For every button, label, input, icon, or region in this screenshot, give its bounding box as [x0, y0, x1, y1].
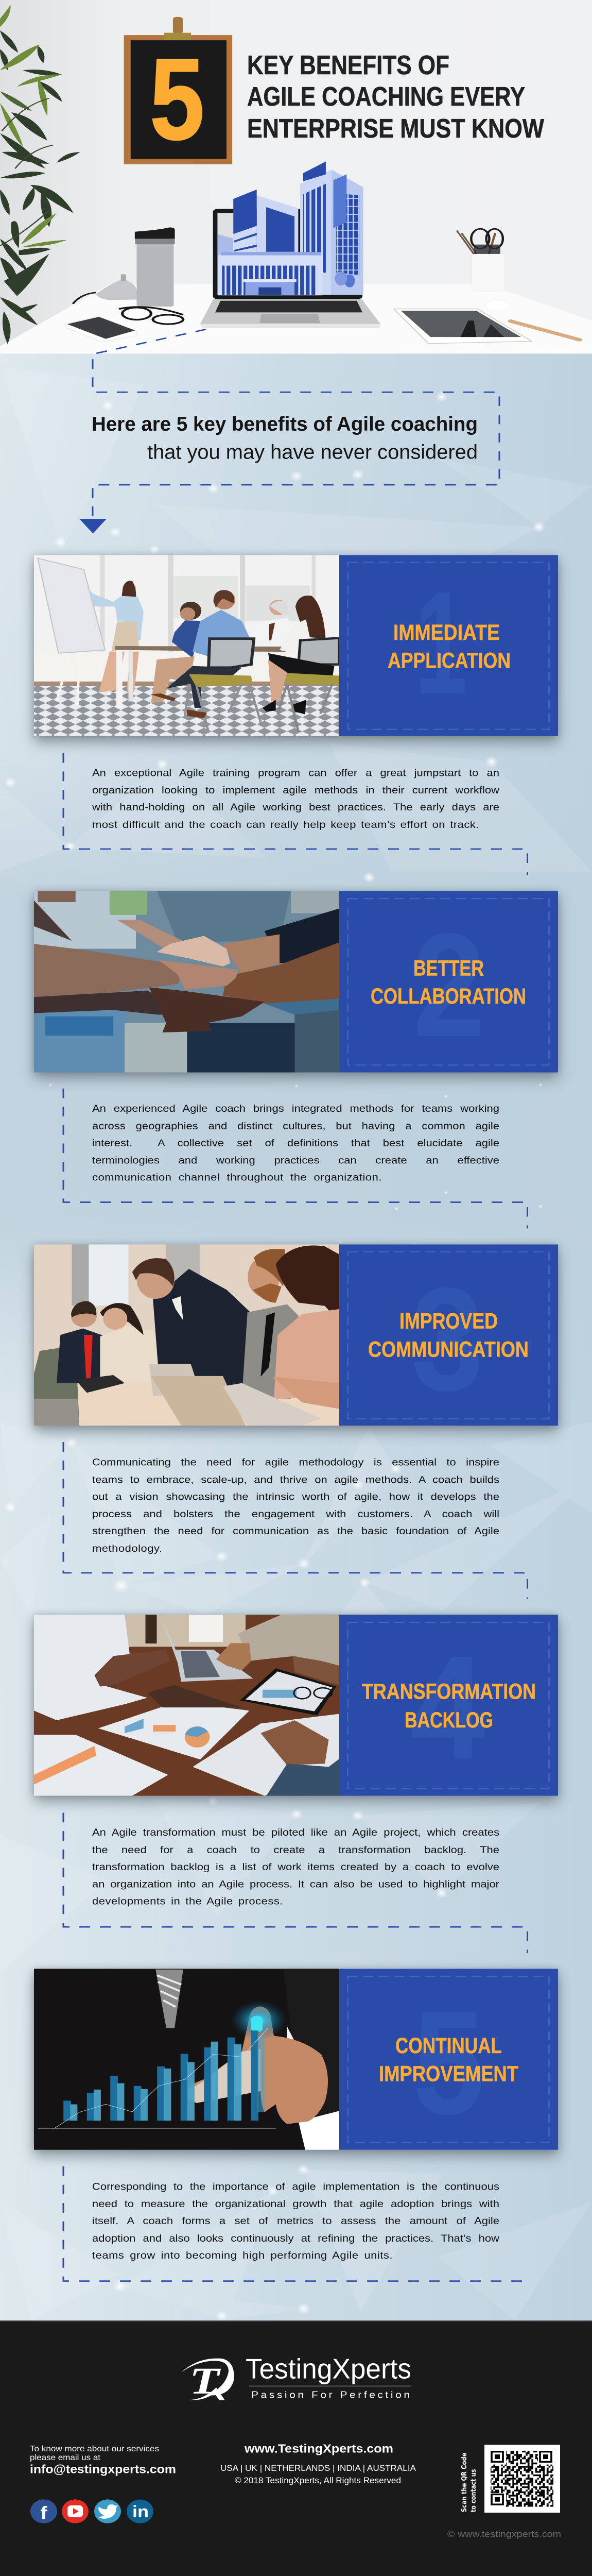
icon: facebook	[30, 2499, 57, 2523]
text block: transformation backlog: An Agile transformation must be piloted like an Agile project, which creates	[92, 1826, 499, 1838]
icon: glasses	[119, 307, 183, 324]
title block: 5	[413, 1980, 485, 2145]
header scene: desk, wall, plant, laptop and building	[0, 0, 592, 353]
text block: better collaboration: An experienced Agile coach brings integrated methods for teams working	[92, 1103, 499, 1114]
logo: TestingXperts: T	[189, 2360, 221, 2402]
icon: linkedin	[127, 2499, 153, 2523]
text block: continual improvement: need to measure the organizational growth that agile adoption brings with	[92, 2198, 499, 2209]
title block	[339, 891, 558, 1073]
icon: lamp base and cable	[73, 274, 136, 304]
panel: card 1 immediate application	[34, 555, 558, 736]
qr caption: Scan the QR Code	[461, 2452, 468, 2512]
watermark url: © www.testingxperts.com	[447, 2529, 561, 2539]
title block	[339, 1245, 558, 1426]
icon: twitter	[94, 2499, 121, 2523]
text block: improved communication: process and bolsters the engagement with customers. A coach will	[92, 1508, 499, 1519]
intro heading	[92, 413, 478, 463]
title block	[339, 1615, 558, 1796]
icon: phone on desk	[65, 316, 136, 342]
text block: transformation backlog: the need for a coach to create a transformation backlog. The	[92, 1844, 499, 1855]
title	[247, 50, 544, 144]
logo: TestingXperts: Passion For Perfection	[251, 2390, 410, 2400]
website and locations	[220, 2442, 416, 2486]
qr code	[484, 2445, 560, 2513]
title block: BETTER	[413, 956, 484, 980]
dashed path: header to intro and first card	[79, 329, 500, 534]
title block: 4	[410, 1625, 486, 1789]
title block	[339, 1969, 558, 2150]
text block: immediate application: organization looking to implement agile methods in their current workflow	[92, 784, 499, 795]
photo: team meeting at whiteboard	[34, 555, 339, 736]
website and locations: © 2018 TestingXperts, All Rights Reserved	[235, 2476, 401, 2486]
panel: card 3 improved communication	[34, 1244, 558, 1426]
icon: laptop	[200, 209, 380, 328]
text block: continual improvement: itself. A coach forms a set of metrics to assess the amount of Agile	[92, 2215, 499, 2227]
website and locations: www.TestingXperts.com	[244, 2442, 393, 2455]
website and locations: USA | UK | NETHERLANDS | INDIA | AUSTRALIA	[220, 2464, 416, 2473]
text block: transformation backlog: transformation backlog is a list of work items created by a coach to evolve	[92, 1861, 499, 1872]
title block: 1	[414, 561, 467, 725]
panel: card 5 continual improvement	[34, 1969, 558, 2150]
title block: IMPROVEMENT	[379, 2062, 518, 2086]
text block: continual improvement	[92, 2181, 499, 2261]
text block: better collaboration: terminologies and working practices can create an effective	[92, 1154, 499, 1166]
text block: immediate application	[92, 767, 499, 830]
text block: better collaboration	[92, 1103, 499, 1183]
icon: plant	[0, 5, 80, 344]
text block: improved communication: methodology.	[92, 1543, 162, 1554]
title block: IMPROVED	[399, 1309, 498, 1333]
text block: better collaboration: across geographies and distinct cultures, but having a common agile	[92, 1120, 499, 1131]
title: KEY BENEFITS OF	[247, 50, 449, 80]
title block: CONTINUAL	[395, 2034, 502, 2058]
logo: TestingXperts	[181, 2353, 411, 2402]
big number five: 5	[150, 35, 204, 164]
title block: 2	[413, 903, 485, 1067]
panel: footer	[0, 2320, 592, 2539]
panel: card 2 better collaboration	[34, 891, 558, 1073]
text block: better collaboration: communication channel throughout the organization.	[92, 1172, 382, 1183]
photo: charts on a meeting table	[34, 1615, 339, 1796]
text block: better collaboration: interest. A collective set of definitions that best elucidate agile	[92, 1137, 499, 1148]
title block	[339, 555, 558, 736]
text block: improved communication: teams to embrace, scale-up, and thrive on agile methods. A coach builds	[92, 1473, 499, 1485]
icon: hanging chalkboard	[124, 17, 232, 164]
photo: colleagues around a laptop	[34, 1245, 339, 1426]
title block: BACKLOG	[405, 1708, 493, 1733]
logo: TestingXperts: TestingXperts	[246, 2353, 411, 2384]
panel: card 4 transformation backlog	[34, 1615, 558, 1796]
icon: travel mug	[135, 228, 175, 307]
icon: linkedin: in	[132, 2502, 149, 2521]
text block: improved communication: Communicating the need for agile methodology is essential to inspire	[92, 1456, 499, 1468]
text block: continual improvement: adoption and also looks continuously at refining the practices. That’s how	[92, 2232, 499, 2244]
text block: immediate application: with hand-holding on all Agile working best practices. The early days are	[92, 801, 499, 813]
text block: transformation backlog: an organization into an Agile process. It can also be used to highlight major	[92, 1878, 499, 1890]
dashed connector 3	[63, 1442, 528, 1599]
title block: IMMEDIATE	[393, 621, 500, 645]
text block: continual improvement: teams grow into becoming high performing Agile units.	[92, 2249, 393, 2261]
qr caption	[461, 2452, 478, 2512]
icon: office building illustration	[217, 161, 363, 295]
text block: improved communication	[92, 1456, 499, 1554]
icon: tablet and pencil	[394, 300, 580, 344]
text block: improved communication: strengthen the need for communication as the basic foundation of Agile	[92, 1525, 499, 1537]
arrow	[79, 519, 107, 533]
dashed connector 5	[63, 2166, 522, 2282]
text block: immediate application: most difficult and the coach can really help keep team’s effort on track.	[92, 819, 479, 830]
icon: pen cup	[457, 229, 505, 292]
text block: transformation backlog	[92, 1826, 499, 1907]
text block: continual improvement: Corresponding to the importance of agile implementation is the continuous	[92, 2181, 499, 2192]
text block: improved communication: out a vision showcasing the intrinsic worth of agile, how it develops the	[92, 1491, 499, 1502]
title block: APPLICATION	[388, 649, 511, 673]
dashed connector 4	[63, 1812, 528, 1953]
contact text: To know more about our services	[30, 2444, 159, 2453]
title block: 3	[411, 1257, 483, 1421]
text block: immediate application: An exceptional Agile training program can offer a great jumpstart to an	[92, 767, 499, 778]
icon: youtube	[62, 2499, 89, 2523]
contact text	[30, 2444, 176, 2476]
qr caption: to contact us	[470, 2469, 478, 2512]
text block: transformation backlog: developments in the Agile process.	[92, 1895, 283, 1907]
desk top	[0, 284, 592, 354]
photo: stacked hands	[34, 891, 339, 1073]
contact text: please email us at	[30, 2453, 100, 2462]
dashed connector 1	[63, 753, 528, 875]
background: pale blue network texture	[0, 353, 592, 2320]
dashed connector 2	[63, 1088, 528, 1228]
icon: facebook: f	[40, 2503, 47, 2523]
photo: hand touching a growth chart	[34, 1969, 339, 2150]
contact text: info@testingxperts.com	[30, 2462, 176, 2476]
